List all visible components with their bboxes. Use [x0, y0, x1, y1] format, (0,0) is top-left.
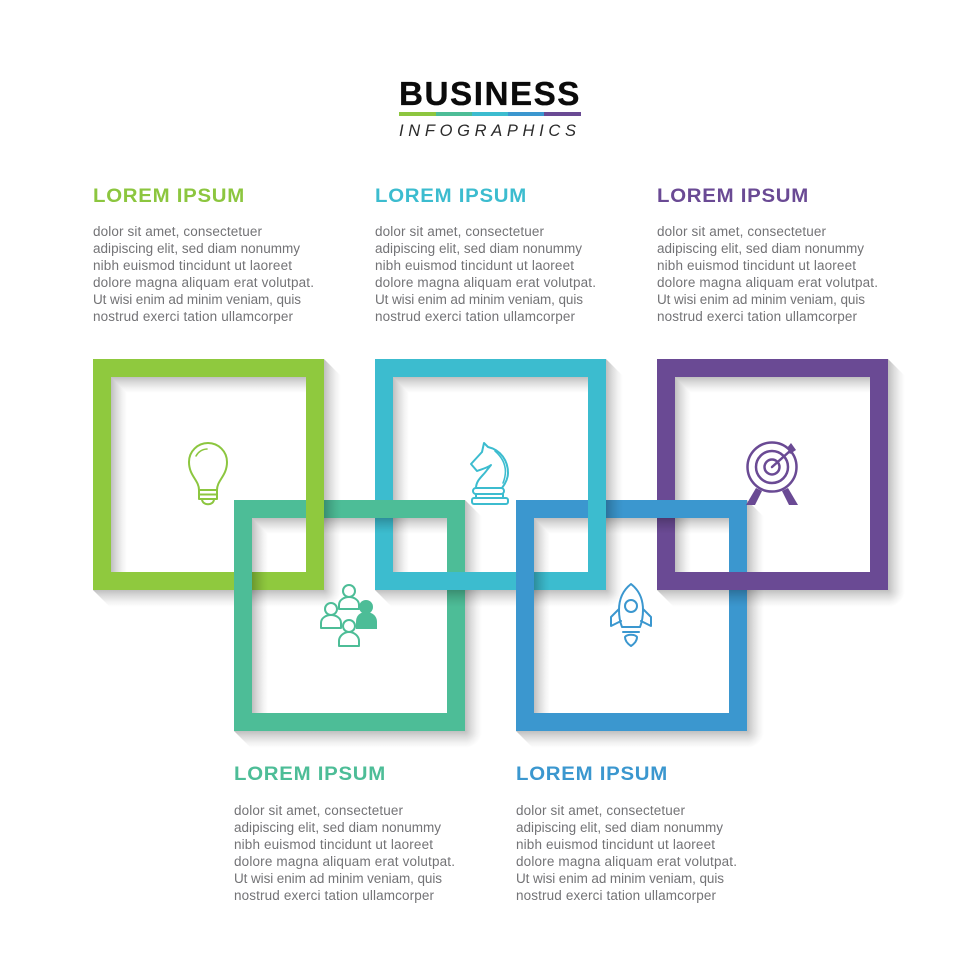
body: lime: nibh euismod tincidunt ut laoreet — [93, 258, 292, 273]
heading: green: LOREM IPSUM — [234, 763, 386, 785]
body: purple — [657, 224, 878, 324]
body: green: dolore magna aliquam erat volutpat. — [234, 854, 455, 869]
heading: teal: LOREM IPSUM — [375, 185, 527, 207]
body: blue: adipiscing elit, sed diam nonummy — [516, 820, 723, 835]
frame: green — [234, 500, 482, 748]
icon: rocket — [611, 584, 651, 646]
body: blue — [516, 803, 737, 903]
heading: blue: LOREM IPSUM — [516, 763, 668, 785]
body: teal: nibh euismod tincidunt ut laoreet — [375, 258, 574, 273]
body: blue: Ut wisi enim ad minim veniam, quis — [516, 871, 724, 886]
body: green: adipiscing elit, sed diam nonummy — [234, 820, 441, 835]
body: purple: dolore magna aliquam erat volutpat. — [657, 275, 878, 290]
weave crossing: lime over green — [306, 490, 341, 540]
body: blue: dolore magna aliquam erat volutpat. — [516, 854, 737, 869]
body: lime: Ut wisi enim ad minim veniam, quis — [93, 292, 301, 307]
icon: light bulb — [189, 443, 227, 504]
body: blue: dolor sit amet, consectetuer — [516, 803, 686, 818]
body: purple: nibh euismod tincidunt ut laoreet — [657, 258, 856, 273]
body: blue: nostrud exerci tation ullamcorper — [516, 888, 716, 903]
heading: lime: LOREM IPSUM — [93, 185, 245, 207]
title — [399, 75, 581, 140]
body: purple: adipiscing elit, sed diam nonummy — [657, 241, 864, 256]
weave crossing: teal over blue — [588, 490, 623, 540]
body: teal — [375, 224, 596, 324]
text block: green — [234, 763, 455, 903]
frame: lime — [93, 359, 341, 607]
person: solid — [356, 600, 377, 629]
frame: purple — [657, 359, 905, 607]
body: lime — [93, 224, 314, 324]
body: lime: dolor sit amet, consectetuer — [93, 224, 262, 239]
body: green — [234, 803, 455, 903]
body: purple: dolor sit amet, consectetuer — [657, 224, 826, 239]
body: green: nibh euismod tincidunt ut laoreet — [234, 837, 433, 852]
text block: blue — [516, 763, 737, 903]
body: teal: Ut wisi enim ad minim veniam, quis — [375, 292, 583, 307]
body: green: dolor sit amet, consectetuer — [234, 803, 404, 818]
body: green: nostrud exerci tation ullamcorper — [234, 888, 434, 903]
body: teal: nostrud exerci tation ullamcorper — [375, 309, 576, 324]
body: purple: Ut wisi enim ad minim veniam, quis — [657, 292, 865, 307]
icon: team people — [321, 585, 377, 646]
body: purple: nostrud exerci tation ullamcorper — [657, 309, 858, 324]
body: green: Ut wisi enim ad minim veniam, quis — [234, 871, 442, 886]
text block: purple — [657, 185, 878, 324]
body: lime: dolore magna aliquam erat volutpat. — [93, 275, 314, 290]
icon: chess knight — [471, 443, 508, 504]
body: blue: nibh euismod tincidunt ut laoreet — [516, 837, 715, 852]
title underline — [399, 112, 581, 116]
frame: teal — [375, 359, 623, 607]
title: BUSINESS: BUSINESS — [399, 75, 581, 112]
weave crossing: teal over green — [447, 572, 491, 607]
body: teal: dolore magna aliquam erat volutpat. — [375, 275, 596, 290]
frame: blue — [516, 500, 764, 748]
body: lime: nostrud exerci tation ullamcorper — [93, 309, 294, 324]
icon: target — [746, 442, 798, 505]
subtitle: INFOGRAPHICS: INFOGRAPHICS — [399, 122, 576, 140]
body: teal: adipiscing elit, sed diam nonummy — [375, 241, 582, 256]
weave crossing: purple over blue — [729, 572, 773, 607]
text block: lime — [93, 185, 314, 324]
heading: purple: LOREM IPSUM — [657, 185, 809, 207]
text block: teal — [375, 185, 596, 324]
body: teal: dolor sit amet, consectetuer — [375, 224, 544, 239]
body: lime: adipiscing elit, sed diam nonummy — [93, 241, 300, 256]
